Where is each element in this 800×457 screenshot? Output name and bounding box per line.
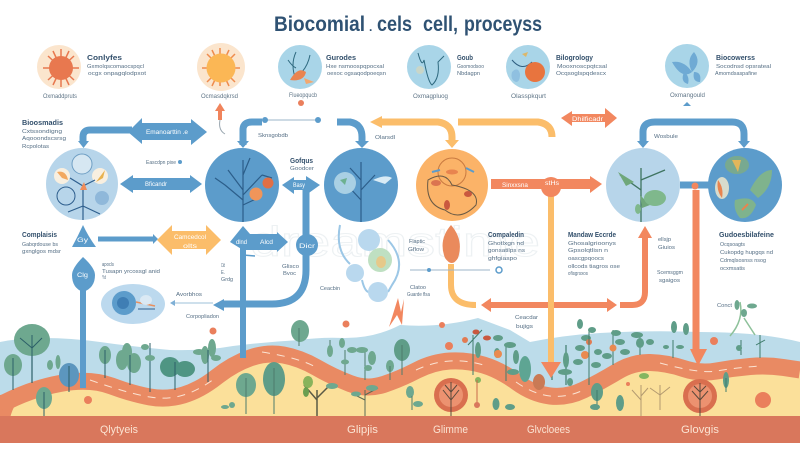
text: top item 1 (87, 53, 147, 77)
label: item 3 (289, 93, 318, 106)
text: Compaledin (488, 230, 525, 262)
label: centre right notes: Gflow (408, 247, 424, 253)
text: top item 1: Conlyfes (87, 53, 122, 62)
text: Gudoesbilafeine: Gudoesbilafeine (719, 230, 774, 239)
label: small centre notes: Glisco (282, 264, 299, 270)
text: Mandaw Eccrde: ollcods tiagros ose (568, 264, 620, 270)
text: top item 5: Ocqsoglspqdescx (556, 71, 606, 77)
text: Mandaw Eccrde: Ghosalgrioonys (568, 241, 616, 247)
icon: apple (506, 45, 550, 89)
text: top item 4: Goub (457, 53, 473, 62)
plants: centre trees (221, 320, 423, 416)
text: Compaledin: ghfgiaspo (488, 256, 517, 262)
label: item 6 (670, 93, 705, 106)
arrow: centre small double and vertical (213, 176, 320, 311)
title: cels (377, 13, 412, 36)
label: item 3: Flueopqucb (289, 93, 318, 99)
arrow: blue connector B to C (237, 117, 369, 148)
band left foot (0, 392, 26, 418)
text: apocls note (102, 262, 160, 281)
arrow: long orange double (481, 226, 652, 312)
arrow: mid-left blue double (120, 175, 202, 193)
arrow: small orange double (561, 108, 617, 128)
title (274, 13, 542, 36)
label: right of arrow notes (657, 237, 683, 284)
label: Avorbhos: Avorbhos (176, 292, 202, 298)
arrow: centre small double and vertical: Basy (293, 182, 306, 189)
bottom labels: Glimme (433, 424, 468, 436)
label: right of arrow notes: sgaigos (659, 278, 680, 284)
text: Complaisis (22, 230, 61, 255)
label: item 5: Olasspkqurt (511, 94, 546, 100)
text: apocls note: apocls (102, 262, 114, 268)
circle A: cell tree (46, 148, 118, 220)
text: Gofqus (290, 156, 314, 172)
text: top item 3: Hxe nsmoospqpocxal (326, 64, 384, 70)
orange path band (0, 354, 800, 405)
text: Gofqus: Gofqus (290, 156, 313, 165)
text: top item 3: oexoc ogsaqodpoeqsn (327, 71, 386, 77)
arrow: orange D to E: stHs (545, 180, 560, 187)
arrow: yellow diamond double: Camcedcol (174, 234, 207, 241)
label: small centre notes: Grdg (221, 277, 233, 283)
arrow: yellow diamond double: olts (183, 243, 198, 250)
text: Gofqus: Goodcer (290, 166, 314, 172)
circle C: blue tree with bubble (324, 148, 398, 222)
arrow: centre small double and vertical: Dicr (299, 243, 316, 250)
bottom labels: Qlytyeis (100, 424, 138, 436)
text: Mandaw Eccrde (568, 230, 620, 277)
label: item 4: Oxmagpluog (413, 94, 448, 100)
label: right of arrow notes: Scemsggm (657, 270, 683, 276)
label: Avorbhos (170, 292, 213, 306)
title: proceyss (464, 13, 542, 36)
plants: middle right (462, 319, 765, 411)
arrow: mid-left blue double: Bficandr (145, 181, 168, 188)
circle E: green plant (606, 148, 680, 222)
text: Bioosmadis: Bioosmadis (22, 118, 63, 127)
label: yellow note: Olarsdl (375, 135, 395, 141)
orange dots (84, 320, 771, 408)
label: Ceacdar: bujigs (516, 324, 533, 330)
label: Ceacdar: Ceacdar (515, 315, 538, 321)
ellipse cell (101, 284, 165, 324)
icon: blue leaves (665, 44, 709, 88)
text: top item 5 (556, 53, 607, 77)
bottom labels: Glipjis (347, 424, 379, 436)
label and sprig: Conct: Conct (717, 303, 732, 309)
label: mid-left note: Eascdpn pixe (146, 160, 176, 166)
arrow: orange D to E: Sinxxsna (502, 182, 528, 189)
arrow: yellow diamond double (157, 225, 221, 255)
bottom labels: Glovgis (681, 424, 720, 436)
icon: cell branches (407, 45, 451, 89)
text: Complaisis: Complaisis (22, 230, 57, 239)
label: small centre notes (221, 263, 340, 292)
arrow: left vertical with teardrops: Gy (77, 237, 89, 244)
text: top item 6 (715, 53, 771, 77)
circle F: leaves (708, 148, 782, 222)
title: . (369, 20, 372, 34)
centre cell diagram (339, 225, 399, 302)
plants: left forest (4, 324, 221, 416)
circle B: blue tree (205, 148, 279, 222)
bottom labels: Glvcloees (527, 424, 570, 436)
circle D: orange cell (416, 149, 488, 221)
label: centre right notes (407, 239, 502, 298)
label: item 1: Oxmaddpruts (43, 94, 77, 100)
label: small centre notes: Bvoc (283, 271, 296, 277)
text: Bioosmadis: Rcpolotas (22, 144, 49, 150)
text: apocls note: Yd (102, 275, 106, 281)
soil (0, 354, 800, 418)
tree emblem: left (434, 378, 468, 416)
label: item 2: Ocmasdqkrsd (201, 94, 238, 100)
bottom bar (0, 416, 800, 443)
arrow: E to F link and orange vertical (680, 182, 710, 366)
arrow: left vertical with teardrops: Clg (77, 272, 88, 279)
text: Mandaw Eccrde: Mandaw Eccrde (568, 230, 616, 239)
label: item 6: Oxmangould (670, 93, 705, 99)
arrow: yellow vertical to soil (541, 195, 561, 378)
watermark: dreamstime (250, 218, 540, 265)
text: top item 1: Gxmolqscomaocspqcl (87, 64, 144, 70)
arrow: small orange double: Dhilficadr (572, 116, 604, 123)
text: top item 6: Socodnsd opsrateal (716, 64, 771, 70)
text: top item 4: Nbdagpn (457, 71, 480, 77)
icon: orange cell (37, 45, 81, 89)
text: Gudoesbilafeine: Cukopdg hupgqs nd (720, 250, 773, 256)
text: Compaledin: Ghotlxgn nd (488, 241, 524, 247)
icon: leaf specimen (278, 45, 322, 89)
text: Bioosmadis (22, 118, 66, 150)
label: connector note: Sknsgobdb (258, 133, 288, 139)
arrow: vertical blue B (230, 226, 288, 358)
dead trees (632, 385, 670, 416)
text: Complaisis: gxnglgos mdsr (22, 249, 61, 255)
leaf bud and yellow curve (443, 225, 476, 305)
label: small centre notes: Ceacbin (320, 286, 340, 292)
arrow: blue connector E to F (637, 122, 750, 148)
bottom labels (100, 424, 720, 436)
text: top item 6: Amomdsaspafine (715, 71, 757, 77)
text: Mandaw Eccrde: oascgpqoocs (568, 256, 604, 262)
label and sprig: Conct (717, 300, 757, 336)
text: Complaisis: Gabqrdouse bs (22, 242, 58, 248)
band dashes (90, 352, 760, 398)
text: Gudoesbilafeine (719, 230, 774, 272)
label: Ceacdar (515, 315, 538, 330)
background hills (0, 318, 800, 420)
label: Corpopliadon: Corpopliadon (186, 314, 219, 320)
text: Gudoesbilafeine: Cdmqlsosnss nsog (720, 258, 766, 264)
arrow: orange D to E (491, 176, 602, 197)
text: top item 5: Bilogrology (556, 53, 594, 62)
arrow: yellow connector to D (370, 116, 552, 148)
arrow: vertical blue B: Alcd (260, 239, 273, 246)
arrow: orange lightning (389, 298, 404, 327)
label: blue note: Wosbule (654, 134, 678, 140)
icon: sun (197, 43, 245, 91)
label: small centre notes: Cld (221, 263, 225, 269)
label: centre right notes: Flaptic (409, 239, 425, 245)
label: right of arrow notes: ellsjp (658, 237, 671, 243)
title: cell, (423, 13, 458, 36)
text: top item 3: Gurodes (326, 53, 356, 62)
tree emblem: right (683, 379, 717, 416)
text: Bioosmadis: Cxtssondigng (22, 129, 62, 135)
text: top item 4: Gsomodsoo (457, 64, 484, 70)
label: centre right notes: Guarde flsa (407, 292, 431, 298)
label: small centre notes: E. (221, 270, 225, 276)
text: top item 3 (326, 53, 386, 77)
icon: small arrow up (215, 103, 225, 134)
text: Compaledin: Compaledin (488, 230, 524, 239)
text: Compaledin: gonsatilps ns (488, 248, 525, 254)
text: apocls note: Tusapn yrcossgl anid (102, 269, 160, 275)
text: top item 4 (457, 53, 484, 77)
text: Mandaw Eccrde: ofisgrsxos (568, 271, 588, 277)
text: top item 5: Mooxnoscpqtcsal (557, 64, 607, 70)
label: centre right notes: Clatoo (410, 285, 426, 291)
arrow: left vertical with teardrops (72, 225, 158, 388)
text: Bioosmadis: Aqooondscsrsg (22, 136, 66, 142)
arrow: top-left blue double (78, 118, 207, 148)
arrow: vertical blue B: dlnd (236, 239, 247, 246)
title: Biocomial (274, 13, 365, 36)
text: Mandaw Eccrde: Gpsolqtlisn n (568, 248, 608, 254)
arrow: top-left blue double: Emanoarttin .e (146, 129, 188, 136)
label: right of arrow notes: Giuios (658, 245, 675, 251)
text: top item 6: Biocowerss (716, 53, 755, 62)
text: Gudoesbilafeine: ocxmsatis (720, 266, 745, 272)
text: Gudoesbilafeine: Ocqsoagts (720, 242, 745, 248)
text: top item 1: ocgx onpagqlodpxot (88, 71, 147, 77)
